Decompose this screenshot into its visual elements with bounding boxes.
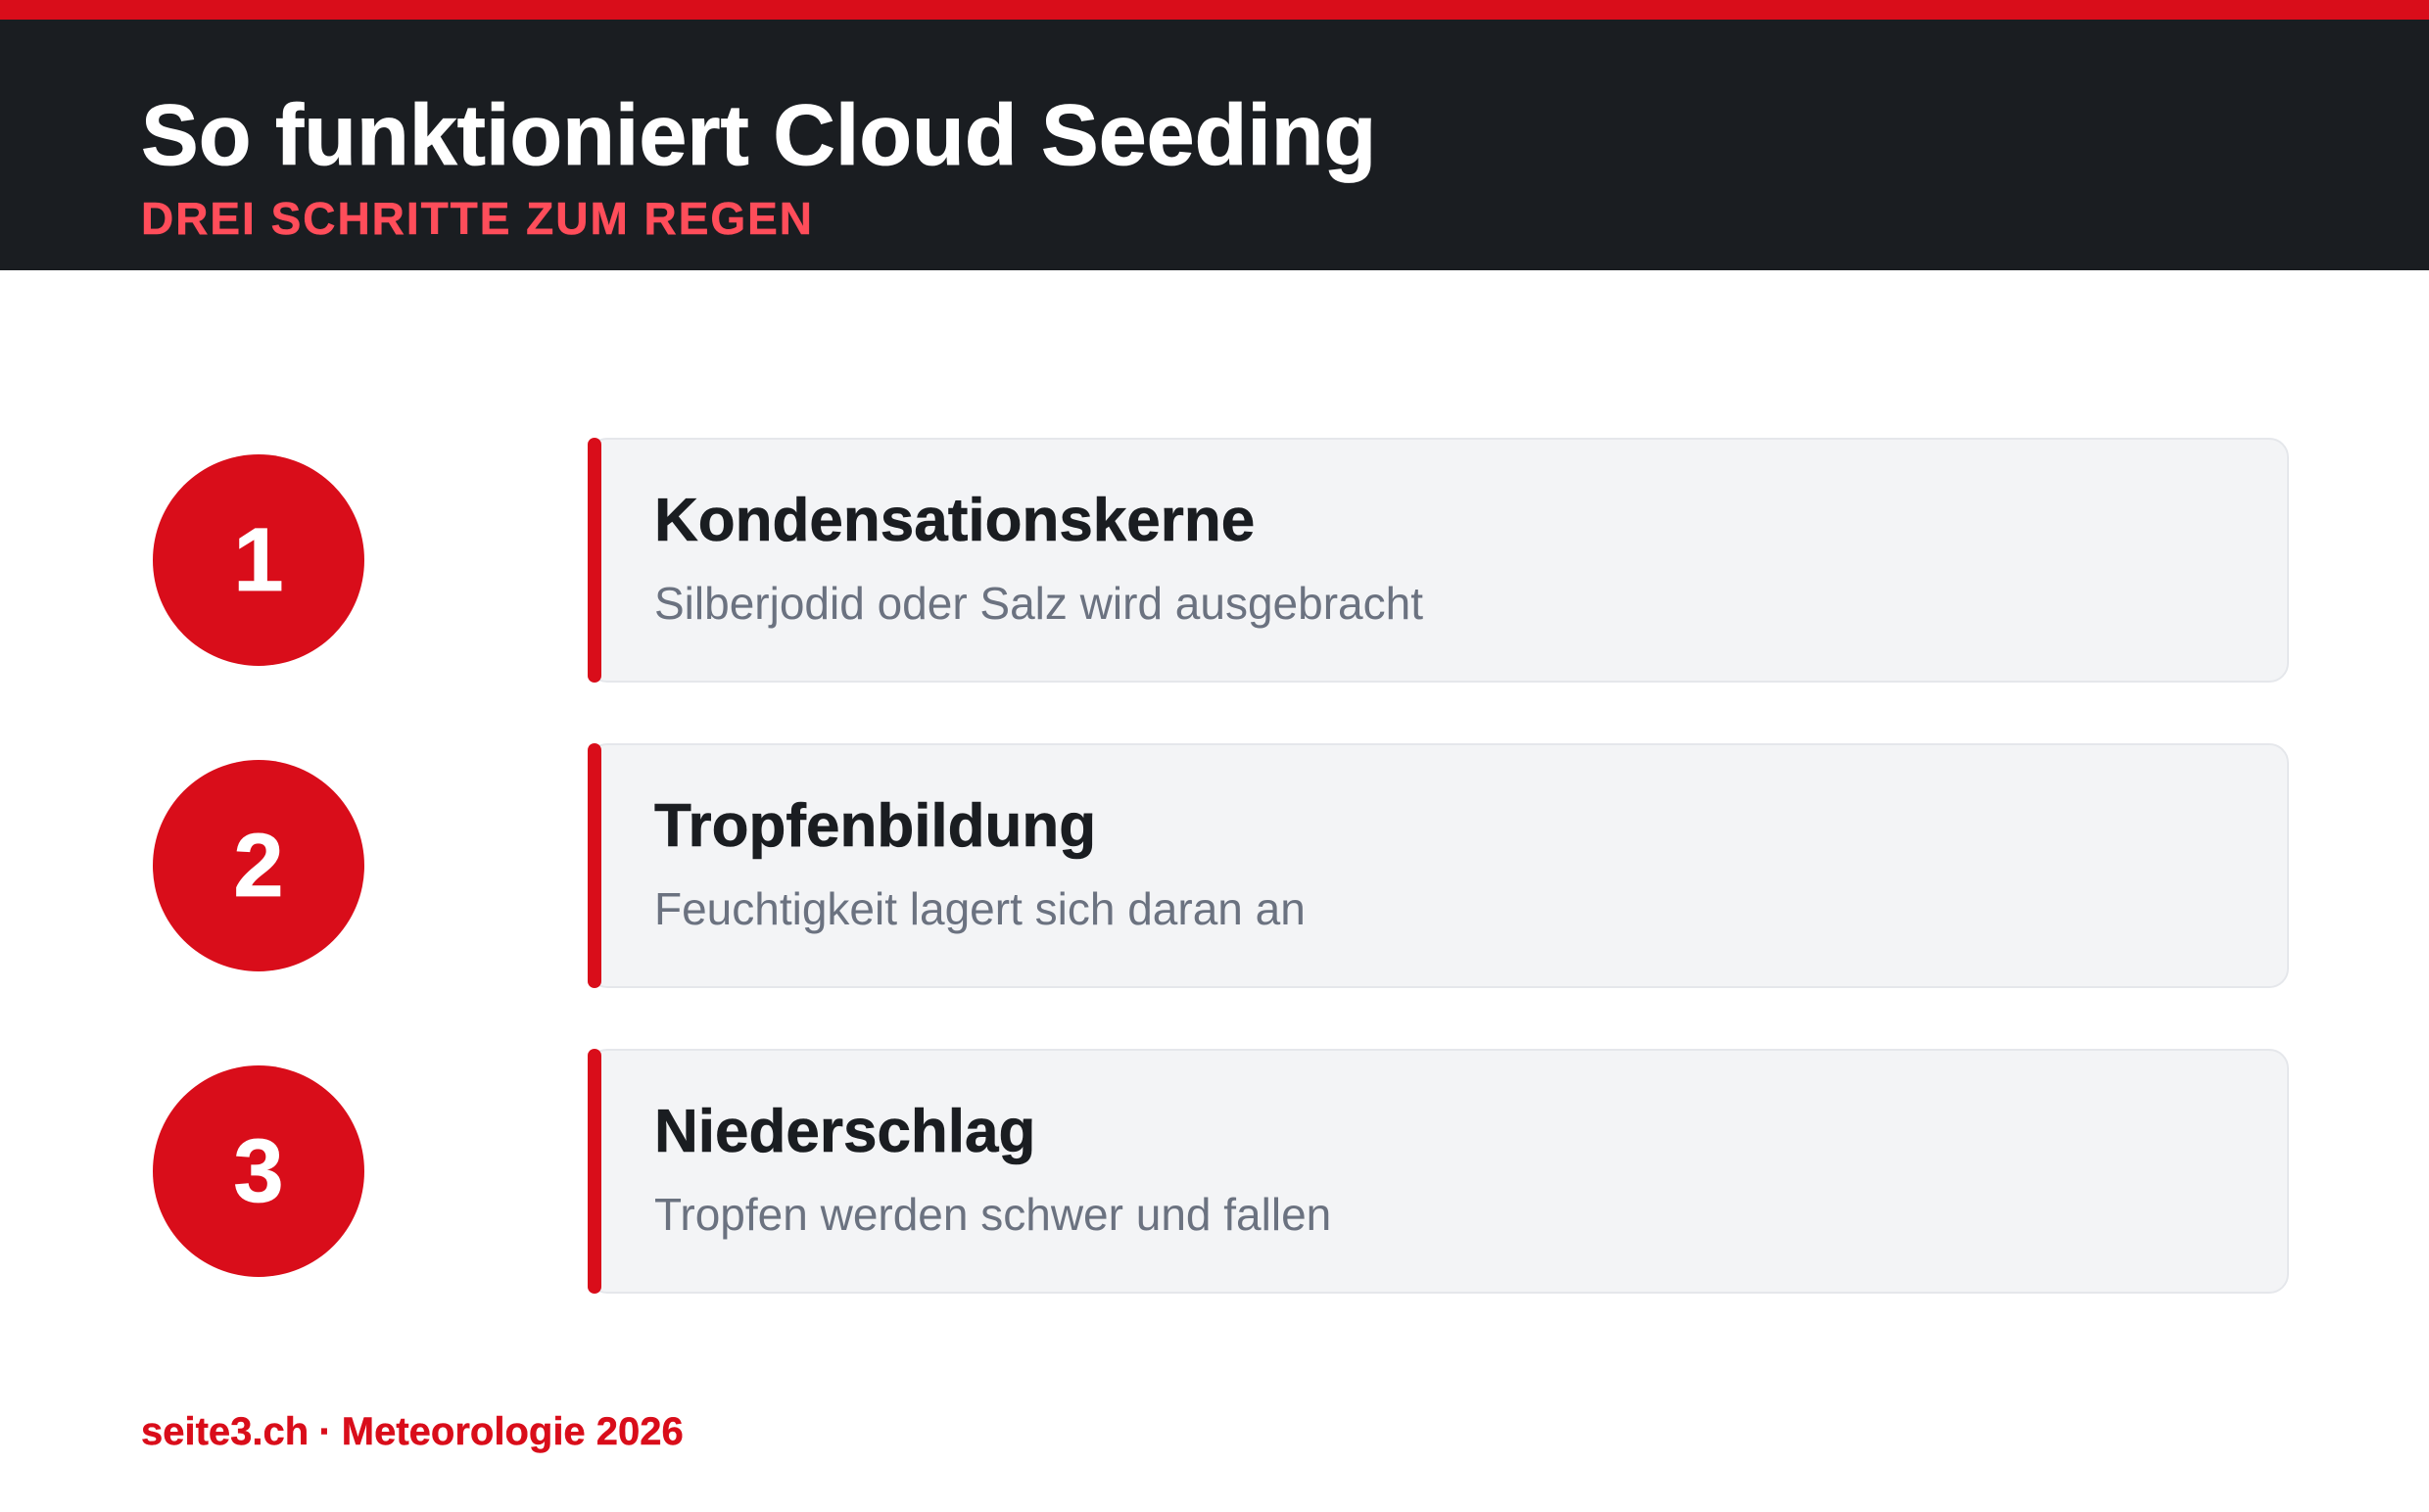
- step 2 number badge: [153, 760, 364, 971]
- step 2 card: [588, 743, 2289, 988]
- step 1 number badge: [153, 454, 364, 666]
- subtitle: DREI SCHRITTE ZUM REGEN: [141, 193, 814, 244]
- step 1 card: [588, 438, 2289, 683]
- step 3 description: Tropfen werden schwer und fallen: [654, 1189, 1331, 1240]
- step 1 heading: Kondensationskerne: [654, 487, 1255, 554]
- step 1 accent bar: [588, 438, 601, 683]
- title: So funktioniert Cloud Seeding: [141, 86, 1376, 183]
- step 3 heading: Niederschlag: [654, 1098, 1035, 1165]
- step 3 number badge: [153, 1065, 364, 1277]
- step 3 number badge: 3: [233, 1121, 284, 1221]
- step 2 accent bar: [588, 743, 601, 988]
- step 3 accent bar: [588, 1049, 601, 1294]
- footer source line: seite3.ch · Meteorologie 2026: [141, 1410, 684, 1453]
- header band: [0, 0, 2429, 270]
- step 1 description: Silberjodid oder Salz wird ausgebracht: [654, 578, 1423, 629]
- step 2 number badge: 2: [233, 816, 284, 916]
- step 1 number badge: 1: [233, 510, 284, 610]
- step 3 card: [588, 1049, 2289, 1294]
- step 2 heading: Tropfenbildung: [654, 792, 1096, 860]
- red top bar: [0, 0, 2429, 20]
- step 2 description: Feuchtigkeit lagert sich daran an: [654, 883, 1306, 934]
